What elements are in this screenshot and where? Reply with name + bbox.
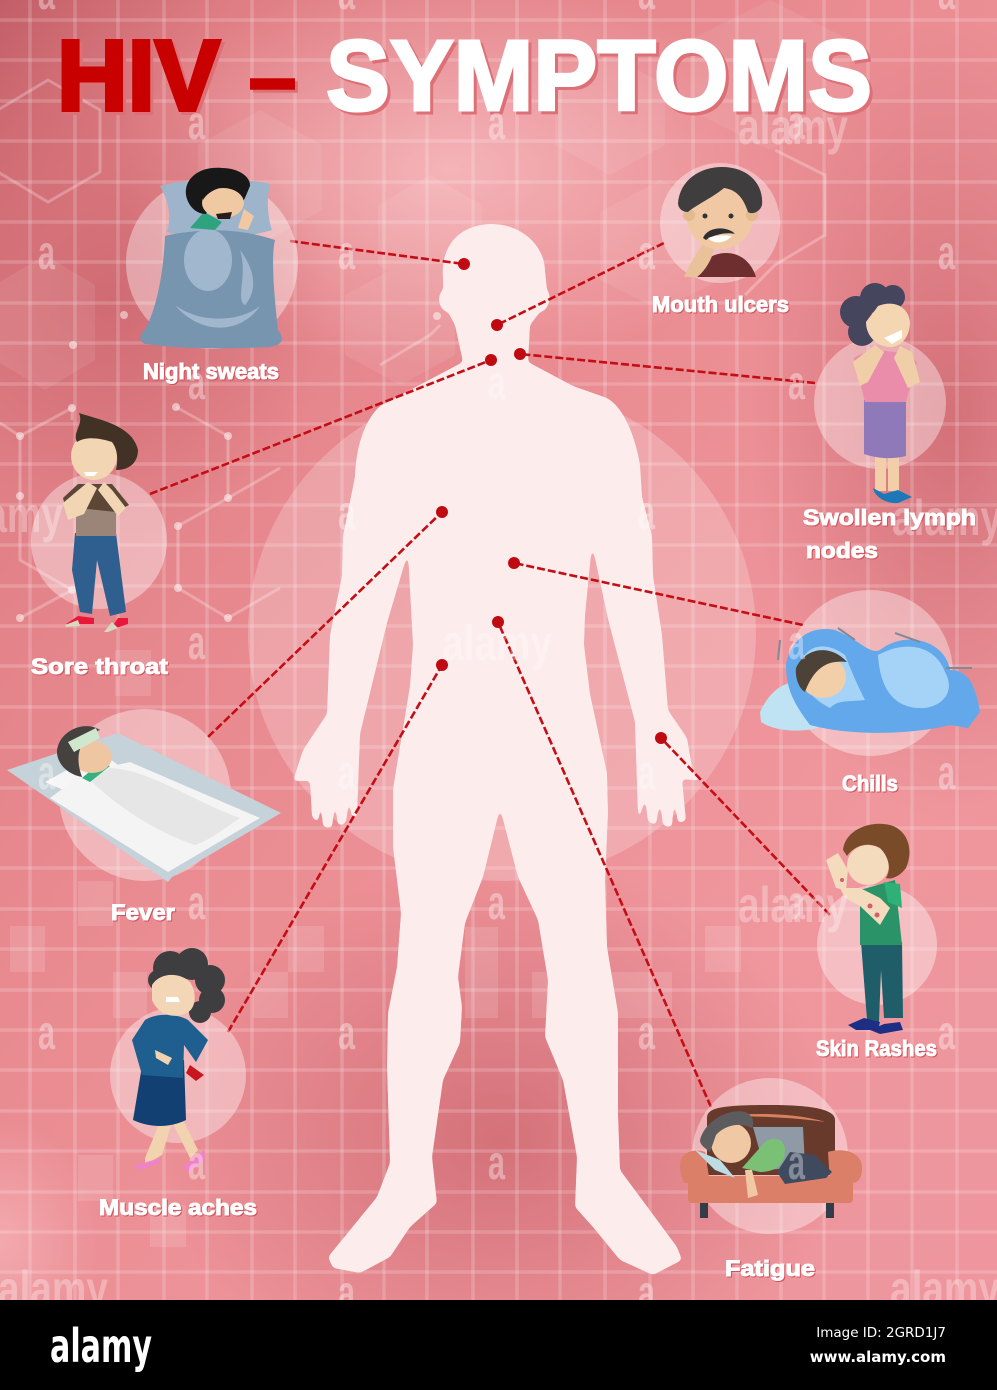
icon: person under blanket <box>140 168 282 348</box>
watermark letters: a <box>338 227 355 280</box>
watermark letters: a <box>338 1007 355 1060</box>
body silhouette <box>293 224 702 1275</box>
label: Fatigue <box>725 1256 815 1281</box>
watermark letters: a <box>788 877 805 930</box>
label: Sore throat <box>31 654 169 679</box>
website: www.alamy.com <box>810 1348 946 1366</box>
watermark letters: a <box>938 747 955 800</box>
watermark letters: a <box>788 97 805 150</box>
faint hexagons <box>0 0 850 390</box>
label: nodes <box>806 538 878 563</box>
panel: muscle aches <box>99 948 257 1220</box>
watermark letters: a <box>488 97 505 150</box>
watermark letters: a <box>788 1137 805 1190</box>
panel: sore throat <box>31 413 169 679</box>
label: Fever <box>111 900 175 925</box>
watermark letters: a <box>638 227 655 280</box>
panel: chills <box>760 590 980 796</box>
watermark letters: a <box>338 747 355 800</box>
body marker dots <box>436 258 667 744</box>
watermark letters: a <box>638 1007 655 1060</box>
panel: skin rashes <box>816 824 937 1061</box>
connector lines <box>150 241 830 1107</box>
icon: man sleeping on sofa <box>680 1105 862 1218</box>
icon: man with sore mouth <box>678 167 762 277</box>
watermark letters: a <box>938 1007 955 1060</box>
watermark letters: a <box>188 97 205 150</box>
watermark letters: a <box>788 617 805 670</box>
watermark letters: a <box>338 1267 355 1320</box>
panel: swollen lymph nodes <box>803 283 976 563</box>
watermark letters: a <box>188 877 205 930</box>
footer bar <box>0 1300 997 1390</box>
label: Chills <box>842 771 898 796</box>
watermark words: alamy <box>738 99 848 155</box>
hexagon outlines <box>0 80 825 618</box>
footer logo: alamy <box>50 1319 152 1373</box>
label <box>803 505 976 563</box>
title <box>57 20 872 133</box>
watermark letters: a <box>338 487 355 540</box>
icon: woman holding neck <box>840 283 920 503</box>
label: Night sweats <box>143 359 279 384</box>
watermark letters: a <box>788 357 805 410</box>
icon: shivering person in blue blanket <box>760 628 980 733</box>
watermark letters: a <box>488 357 505 410</box>
watermark letters: a <box>638 487 655 540</box>
hexagon nodes <box>16 311 441 622</box>
icon: person lying in bed <box>7 726 281 882</box>
image id: Image ID: 2GRD1J7 <box>816 1325 946 1341</box>
icon: boy holding throat <box>63 413 138 632</box>
title: dash: – <box>248 21 297 133</box>
watermark words: alamy <box>0 1261 108 1317</box>
watermark letters: a <box>188 1137 205 1190</box>
panel: fatigue <box>680 1078 862 1281</box>
label: Mouth ulcers <box>652 292 789 317</box>
watermark letters: a <box>488 1137 505 1190</box>
label: Swollen lymph <box>803 505 976 530</box>
title: symptoms: SYMPTOMS <box>326 20 872 132</box>
watermark letters: a <box>938 227 955 280</box>
watermark letters: a <box>188 357 205 410</box>
watermark letters: a <box>188 617 205 670</box>
watermark words: alamy <box>738 877 848 933</box>
panel: mouth ulcers <box>652 163 789 317</box>
watermark words: alamy <box>442 615 552 671</box>
panel: night sweats <box>126 168 298 384</box>
icon: boy with rash on arm <box>826 824 909 1034</box>
panel: fever <box>7 709 281 925</box>
label: Muscle aches <box>99 1195 257 1220</box>
watermark letters: a <box>638 1267 655 1320</box>
icon: woman holding back <box>132 948 225 1172</box>
watermark letters: a <box>38 227 55 280</box>
watermark letters: a <box>38 1007 55 1060</box>
watermark letters: a <box>38 747 55 800</box>
large halo behind body <box>248 385 756 881</box>
label: Skin Rashes <box>816 1036 937 1061</box>
title: HIV: HIV <box>57 20 220 132</box>
watermark letters: a <box>488 877 505 930</box>
watermark letters: a <box>638 747 655 800</box>
light squares <box>10 650 741 1247</box>
